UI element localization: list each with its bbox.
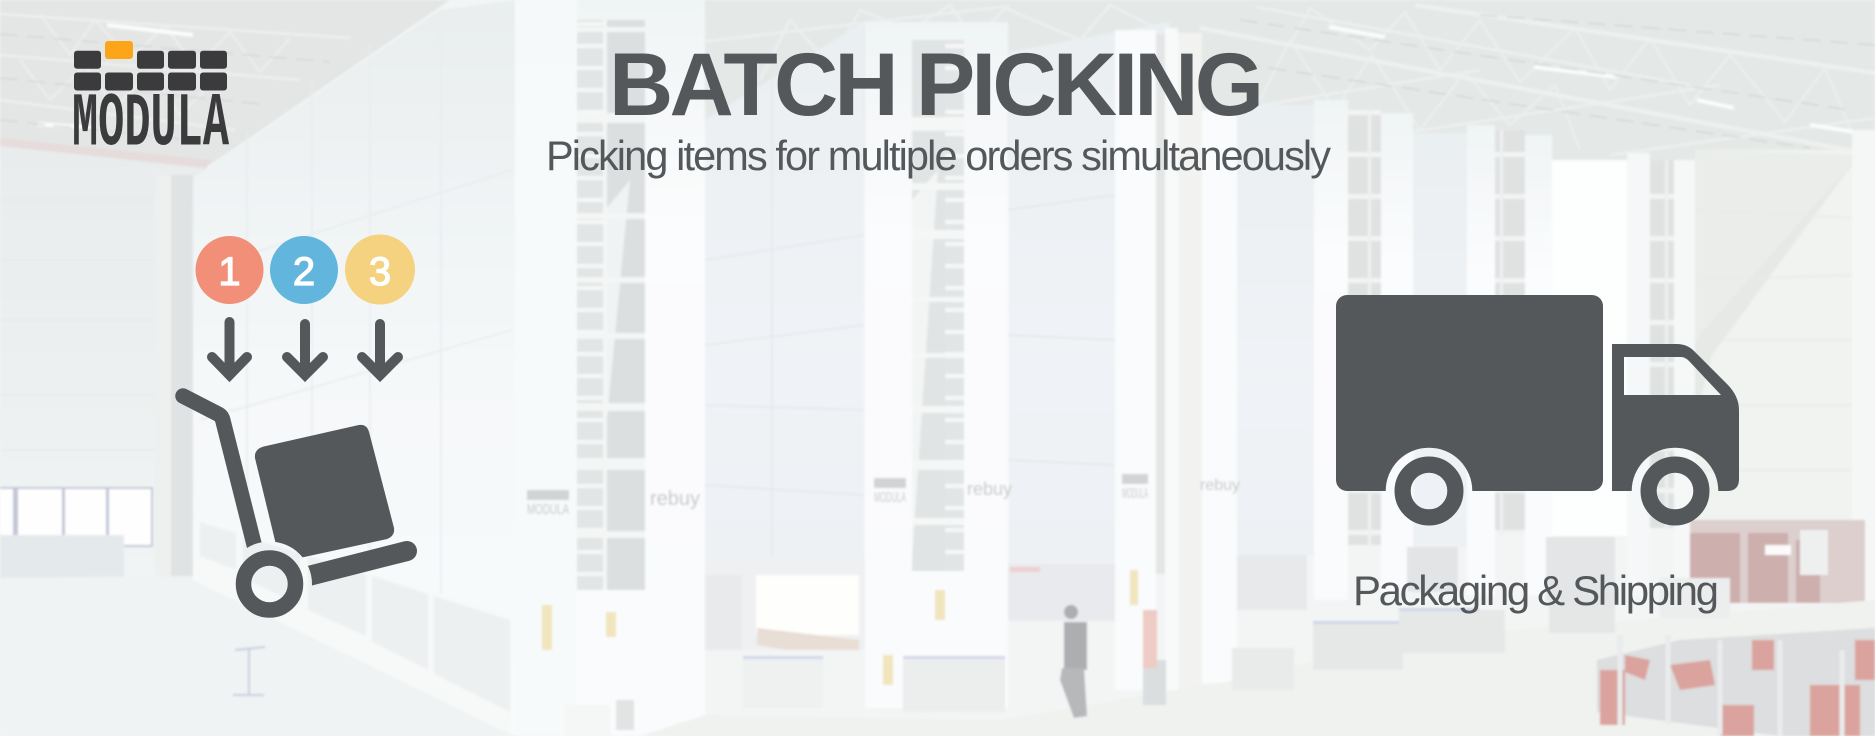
title: BATCH PICKING [609,34,1264,134]
background: washed warehouse photo: MODULA [1122,485,1148,502]
logo: Modula [72,41,229,168]
order 2 badge [270,236,338,304]
order 2 badge: 2 [293,250,315,294]
background: washed warehouse photo: MODULA [527,501,569,518]
column 1 window strip [577,20,605,590]
subtitle: Picking items for multiple orders simultaneously [546,132,1331,179]
arrow: order 1 down [212,322,247,375]
background: washed warehouse photo: rebuy [650,488,700,510]
order 1 badge: 1 [218,250,241,294]
icon: hand truck with box [183,396,407,610]
order 3 badge: 3 [369,250,391,294]
order 1 badge [196,236,264,304]
logo orange block [105,41,133,59]
arrow: order 2 down [287,324,323,375]
logo wordmark: MODULA [72,82,229,168]
background: washed warehouse photo: rebuy [967,479,1012,499]
icon: delivery truck [1336,295,1739,517]
background: washed warehouse photo: MODULA [874,489,906,506]
logo grid blocks [74,51,227,90]
order 3 badge [345,234,415,304]
caption: packaging and shipping: Packaging & Shipping [1353,567,1719,614]
background: washed warehouse photo: rebuy [1200,477,1240,494]
arrow: order 3 down [362,324,398,375]
column 2 window strip [912,40,945,571]
